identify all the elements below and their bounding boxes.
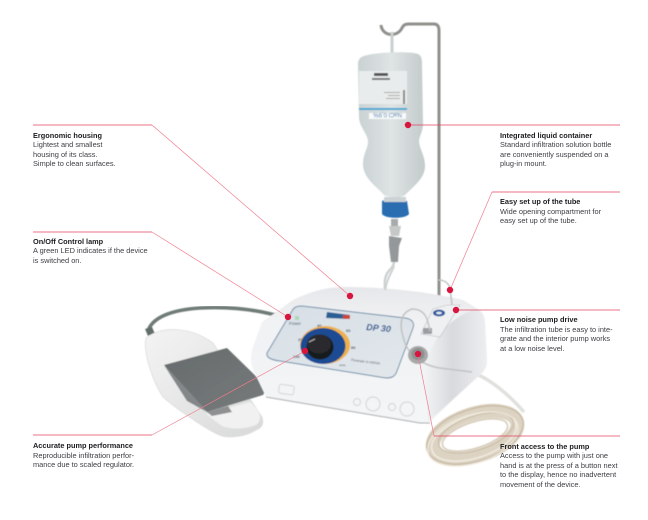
text: on/off control lamp: On/Off Control lamp — [33, 237, 104, 246]
foot pedal cable — [145, 308, 282, 336]
text: integrated liquid container: Standard infiltration solution bottle — [500, 140, 611, 149]
device body — [251, 287, 487, 423]
text: easy set up of the tube: Wide opening compartment for — [500, 207, 602, 216]
dial scale: 100 — [293, 354, 300, 359]
pump compartment — [401, 305, 472, 372]
text: integrated liquid container: are conveniently suspended on a — [500, 150, 609, 159]
text: low noise pump drive: grate and the interior pump works — [500, 334, 610, 343]
dial scale: 60 — [346, 328, 351, 333]
control panel — [267, 306, 414, 378]
text: on/off control lamp — [33, 237, 148, 265]
text: low noise pump drive: Low noise pump drive — [500, 315, 578, 324]
text: front access to the pump: movement of the device. — [500, 480, 581, 489]
dial scale: 20 — [298, 337, 303, 342]
foot pedal — [145, 330, 268, 437]
knob — [306, 334, 334, 360]
liquid container bottle — [358, 32, 425, 290]
dial scale: 40 — [317, 323, 322, 328]
text: ergonomic housing: Lightest and smallest — [33, 140, 102, 149]
text: ergonomic housing: Simple to clean surfaces. — [33, 159, 116, 168]
text: on/off control lamp: A green LED indicates if the device — [33, 246, 148, 255]
tube at mount — [438, 280, 452, 305]
device side facet — [424, 309, 487, 422]
text: front access to the pump — [500, 442, 618, 489]
text: easy set up of the tube — [500, 197, 602, 225]
power LED — [289, 316, 301, 326]
text: low noise pump drive: The infiltration tube is easy to inte- — [500, 325, 613, 334]
text: front access to the pump: to the display, hence no inadvertent — [500, 470, 616, 479]
text: ergonomic housing — [33, 131, 116, 168]
bottom buttons — [278, 384, 414, 416]
text: accurate pump performance — [33, 441, 135, 469]
dial — [300, 326, 352, 365]
infusion stand — [381, 24, 439, 296]
text: front access to the pump: Access to the pump with just one — [500, 451, 608, 460]
red markers — [285, 122, 459, 357]
text: integrated liquid container — [500, 131, 611, 168]
tube coil — [419, 372, 531, 476]
dial scale: 100 — [339, 362, 346, 367]
text: front access to the pump: Front access to the pump — [500, 442, 590, 451]
brand logo — [326, 312, 350, 319]
pump device: Flowrate in ml/min — [351, 358, 380, 366]
text: easy set up of the tube: Easy set up of the tube — [500, 197, 580, 206]
liquid container bottle: NaCl 0,9% — [373, 111, 402, 117]
dial scale: 80 — [351, 345, 356, 350]
text: easy set up of the tube: easy set up of the tube. — [500, 216, 577, 225]
text: front access to the pump: hand is at the press of a button next — [500, 461, 618, 470]
front access button — [408, 346, 428, 364]
text: ergonomic housing: housing of its class. — [33, 150, 98, 159]
pump device — [251, 266, 487, 423]
text: accurate pump performance: Reproducible infiltration perfor- — [33, 451, 135, 460]
text: low noise pump drive — [500, 315, 613, 353]
power LED: Power — [289, 321, 301, 326]
leader lines and markers — [33, 125, 620, 436]
text: integrated liquid container: Integrated liquid container — [500, 131, 592, 140]
text: integrated liquid container: plug-in mount. — [500, 159, 547, 168]
dial scale — [293, 323, 356, 367]
text: accurate pump performance: mance due to scaled regulator. — [33, 460, 134, 469]
text: accurate pump performance: Accurate pump performance — [33, 441, 133, 450]
text: ergonomic housing: Ergonomic housing — [33, 131, 102, 140]
model label: DP 30 — [366, 322, 391, 334]
text: on/off control lamp: is switched on. — [33, 256, 81, 265]
text: low noise pump drive: at a low noise level. — [500, 344, 564, 353]
